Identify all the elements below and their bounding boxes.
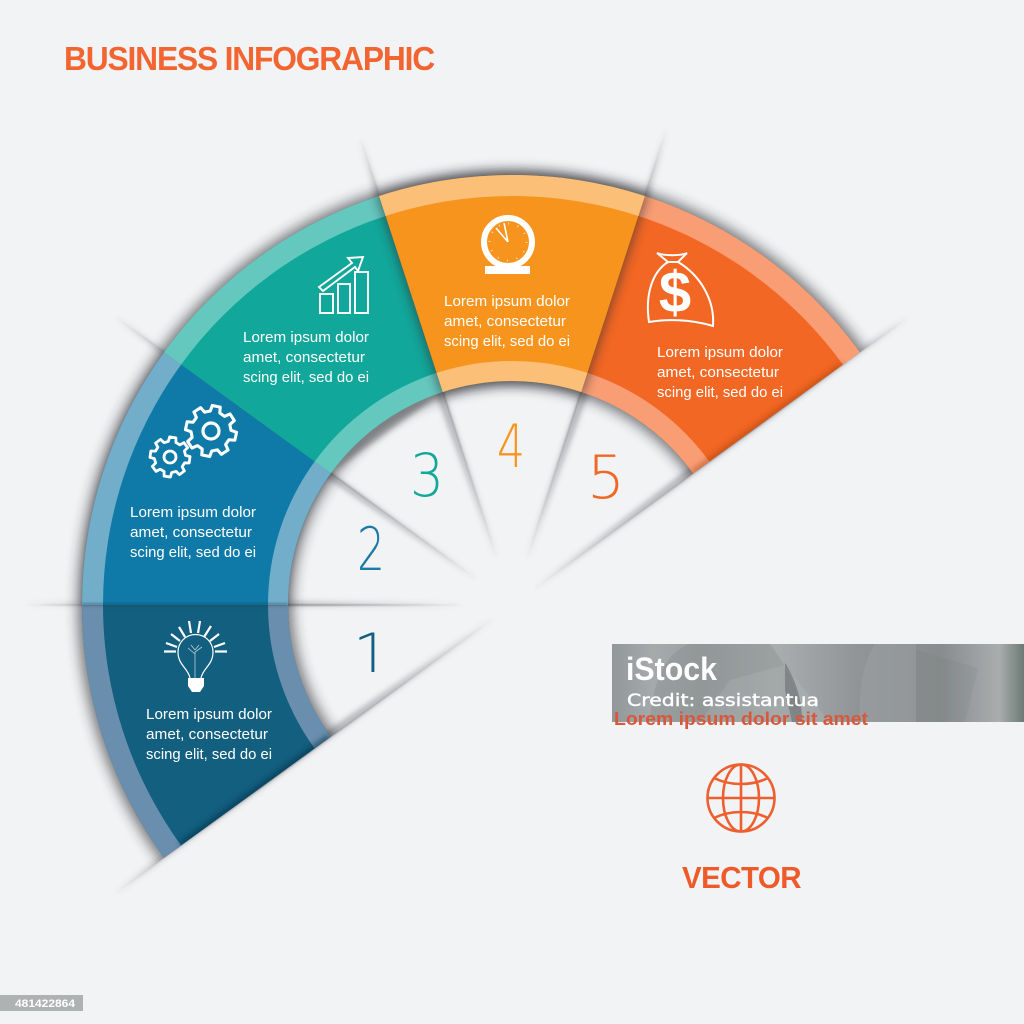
segment 4 — [379, 175, 645, 392]
text block 5 — [657, 345, 783, 401]
text block 4: scing elit, sed do ei — [444, 334, 570, 350]
text block 3 — [243, 330, 369, 386]
icon: gears — [148, 401, 241, 479]
text block 4 — [444, 294, 570, 350]
text block 3: amet, consectetur — [243, 350, 365, 366]
icon: globe — [708, 764, 774, 832]
text block 2: amet, consectetur — [130, 525, 252, 541]
spoke shadows — [25, 129, 910, 894]
text block 4: Lorem ipsum dolor — [444, 294, 570, 310]
text block 1: scing elit, sed do ei — [146, 747, 272, 763]
segment 1 — [82, 605, 331, 858]
segment 5 — [581, 196, 860, 473]
semicircular chart — [25, 129, 910, 894]
text block 1 — [146, 707, 272, 763]
subtitle: Lorem ipsum dolor sit amet — [614, 708, 868, 729]
text block 2: scing elit, sed do ei — [130, 545, 256, 561]
text block 1: Lorem ipsum dolor — [146, 707, 272, 723]
edge shading on end segments — [181, 365, 843, 845]
watermark logo: iStock — [626, 651, 717, 687]
number 4: 4 — [497, 412, 525, 482]
text block 2: Lorem ipsum dolor — [130, 505, 256, 521]
text block 2 — [130, 505, 256, 561]
text block 5: Lorem ipsum dolor — [657, 345, 783, 361]
watermark credit: Credit: assistantua — [627, 691, 819, 711]
text block 5: scing elit, sed do ei — [657, 385, 783, 401]
segment 2 — [82, 352, 331, 605]
stock id tag — [0, 995, 83, 1011]
number 3: 3 — [410, 441, 444, 511]
text block 3: scing elit, sed do ei — [243, 370, 369, 386]
text block 1: amet, consectetur — [146, 727, 268, 743]
title: BUSINESS INFOGRAPHIC — [64, 40, 434, 77]
segment 3 — [164, 196, 443, 473]
icon: light bulb — [164, 621, 227, 692]
number 5: 5 — [587, 443, 625, 513]
text block 3: Lorem ipsum dolor — [243, 330, 369, 346]
number 1: 1 — [353, 621, 391, 691]
vector label: VECTOR — [682, 860, 801, 895]
seam between segments 1 and 2 — [82, 602, 288, 606]
watermark banner — [612, 644, 1024, 722]
icon: money bag — [648, 253, 713, 326]
text block 4: amet, consectetur — [444, 314, 566, 330]
icon: clock — [484, 218, 532, 274]
icon: bar chart with arrow — [319, 257, 368, 313]
icon: money bag: $ — [659, 260, 691, 325]
ring outer and inner shadow — [82, 175, 860, 858]
number 2: 2 — [357, 515, 385, 585]
stock id tag: 481422864 — [15, 998, 76, 1010]
text block 5: amet, consectetur — [657, 365, 779, 381]
